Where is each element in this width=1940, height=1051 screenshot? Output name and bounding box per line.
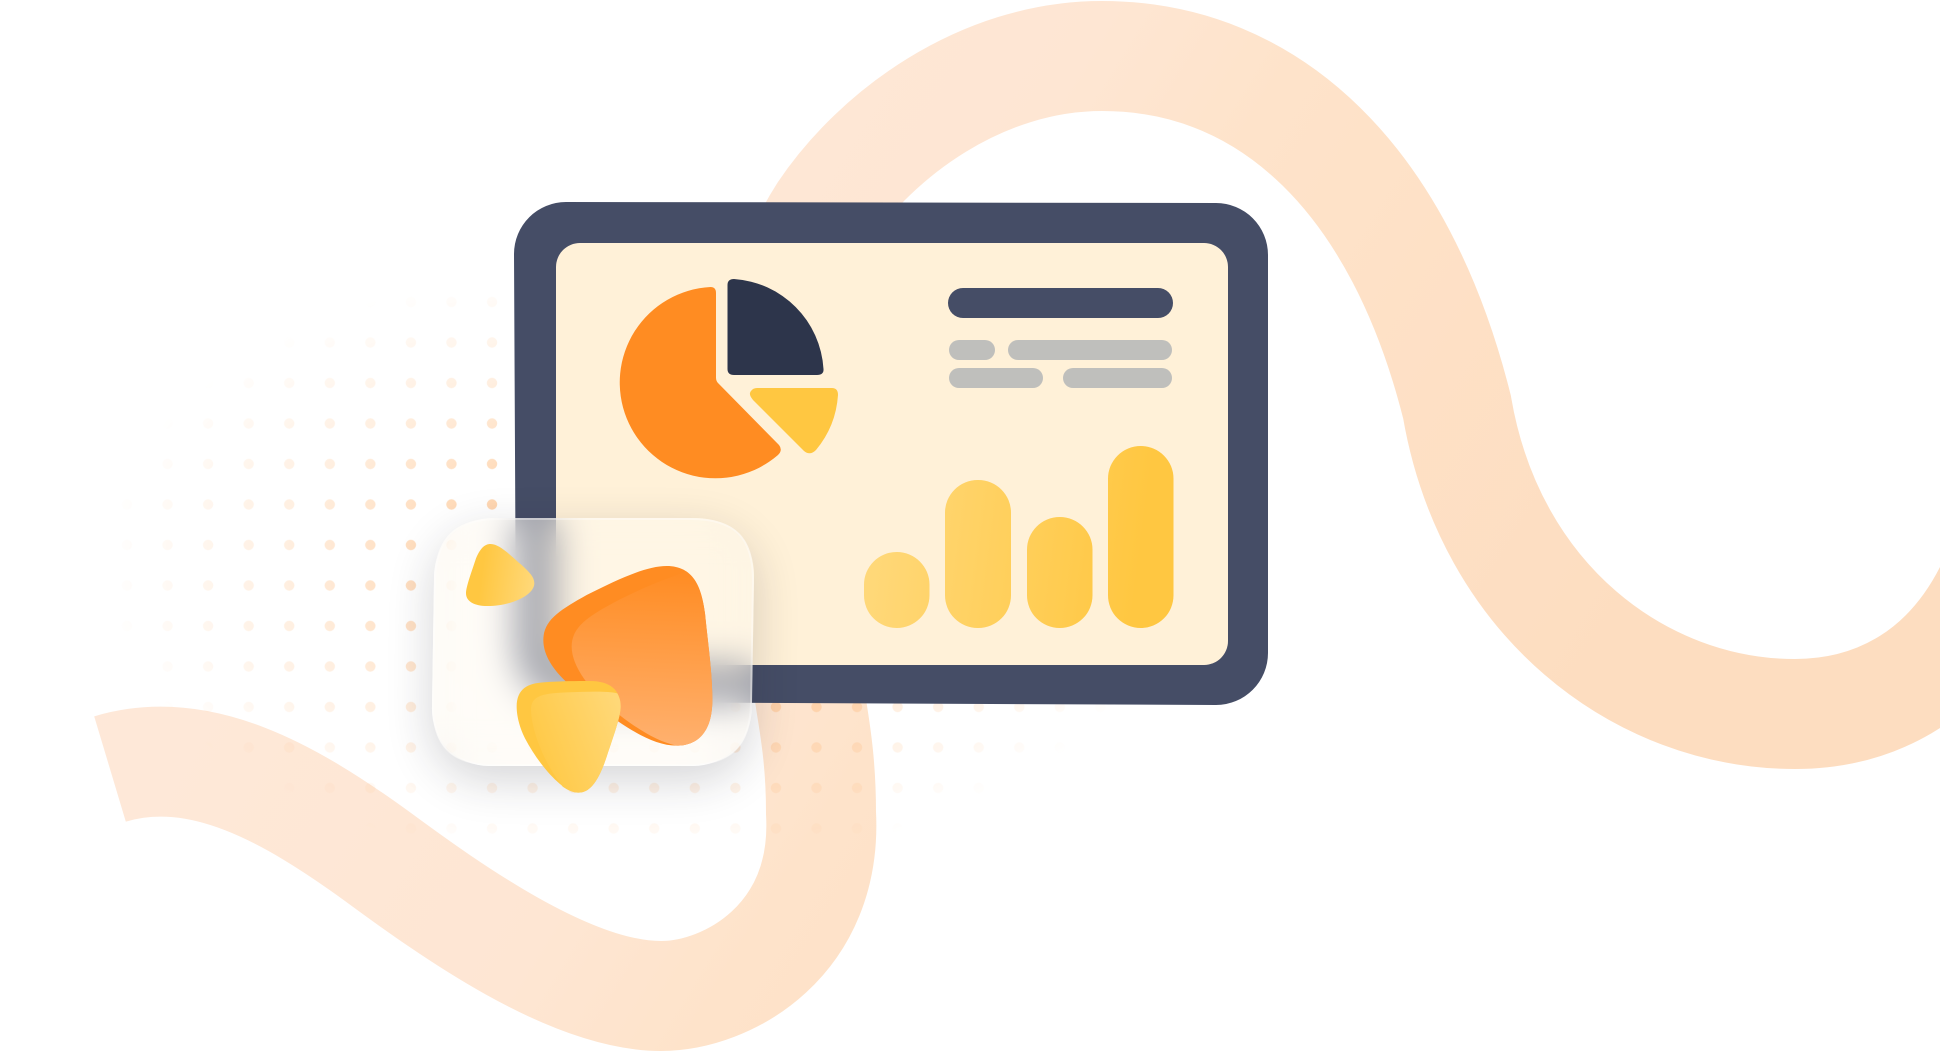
large orange blob [543,566,712,746]
heading line [948,288,1173,318]
medium line left [949,368,1043,388]
bar 4 [1108,446,1174,628]
long line [1008,340,1172,360]
bar chart [864,446,1174,628]
glass card edge highlight [432,519,754,765]
frosted glass card [431,518,755,766]
pie slice: orange [620,287,781,478]
small yellow blob [466,544,534,606]
monitor screen [556,243,1228,665]
dot grid [162,300,1064,834]
blob front layer [572,572,712,746]
medium line right [1063,368,1172,388]
yellow front layer [531,692,621,793]
pie chart [620,279,838,478]
text placeholder lines [948,288,1173,388]
large yellow blob [517,681,621,793]
bar 1 [864,552,930,628]
bar 2 [945,480,1011,628]
yellow back layer [517,681,621,793]
bar 3 [1027,517,1092,628]
monitor [514,202,1268,705]
pie slice: yellow [750,388,838,453]
blob back layer [543,566,712,746]
pie slice: navy [728,279,824,375]
short line [949,340,995,360]
glass card shadow [431,518,755,766]
monitor frame [514,202,1268,705]
